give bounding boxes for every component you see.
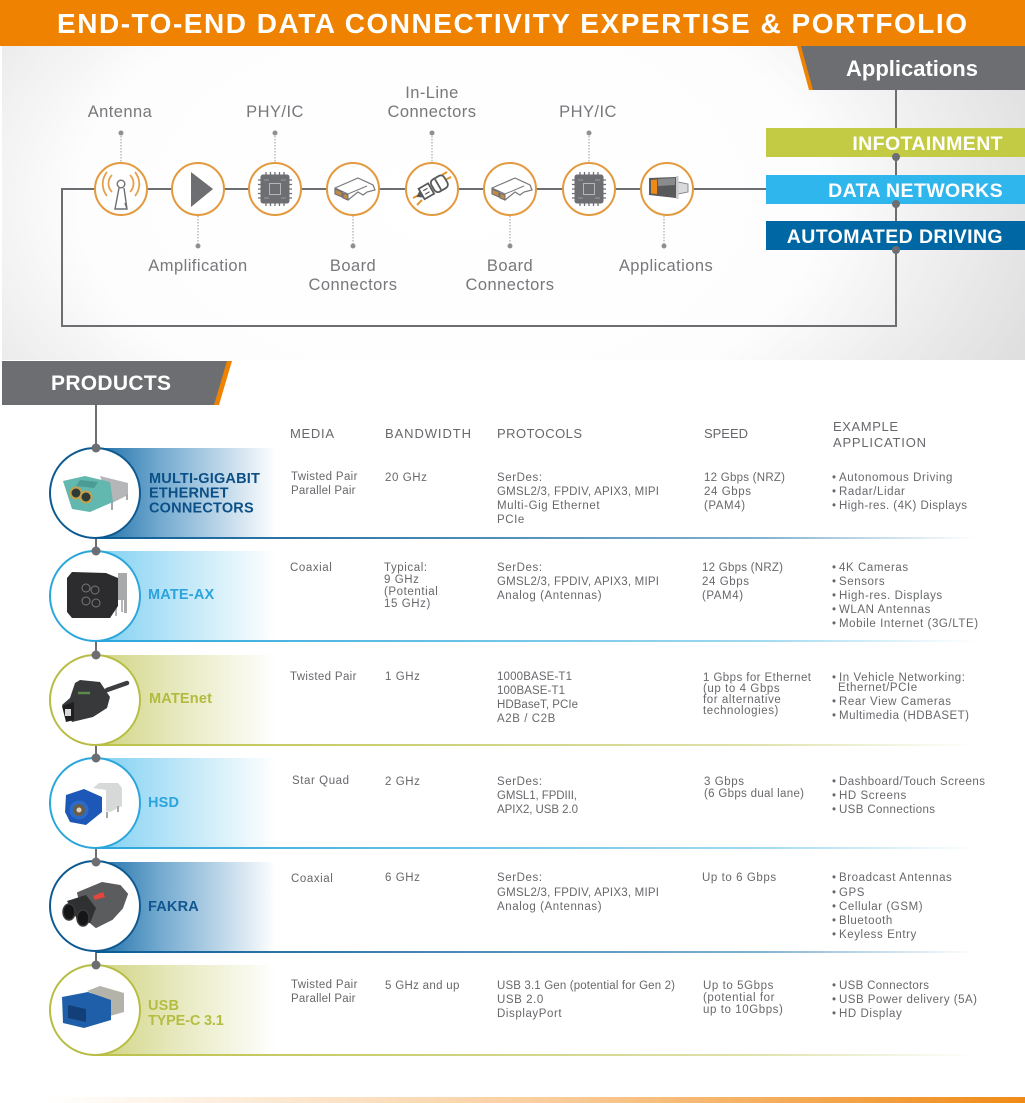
table row 1 values: High-res. (4K) Displays — [839, 500, 967, 512]
table row 1 values: Autonomous Driving — [839, 472, 953, 484]
row: multi-gigabit ethernet connectors: MULTI-GIGABIT — [149, 471, 260, 487]
table row 5 values: Analog (Antennas) — [497, 901, 602, 913]
table row 5 values: Broadcast Antennas — [839, 872, 952, 884]
products tab: PRODUCTS — [51, 372, 171, 395]
table row 2 values: • — [832, 590, 837, 602]
table row 6 values: • — [832, 1008, 837, 1020]
table row 2 values: 4K Cameras — [839, 562, 909, 574]
table row 4 values: Star Quad — [292, 775, 350, 787]
table row 1 values: Radar/Lidar — [839, 486, 905, 498]
table row 6 values: USB Connectors — [839, 980, 929, 992]
table row 5 values: • — [832, 872, 837, 884]
table row 6 values: up to 10Gbps) — [703, 1004, 783, 1016]
table row 1 values: GMSL2/3, FPDIV, APIX3, MIPI — [497, 486, 659, 498]
application bar: automated driving: AUTOMATED DRIVING — [787, 226, 1003, 248]
row: USB Type-C 3.1: TYPE-C 3.1 — [148, 1013, 224, 1029]
table row 2 values: Sensors — [839, 576, 885, 588]
table row 5 values: 6 GHz — [385, 872, 420, 884]
table row 3 values: 1000BASE-T1 — [497, 671, 572, 683]
table row 2 values: SerDes: — [497, 562, 543, 574]
table row 2 values: • — [832, 618, 837, 630]
connector image: FAKRA — [63, 883, 127, 927]
signal chain labels: PHY/IC — [559, 103, 617, 121]
background panel: signal chain — [2, 46, 1025, 360]
table row 3 values: • — [832, 672, 837, 684]
table row 6 values: • — [832, 994, 837, 1006]
table row 4 values: APIX2, USB 2.0 — [497, 804, 578, 816]
applications tab — [797, 46, 1025, 90]
table row 2 values: 24 Gbps — [702, 576, 750, 588]
table row 6 values: USB 2.0 — [497, 994, 544, 1006]
table row 5 values: • — [832, 887, 837, 899]
icon: antenna — [95, 163, 147, 215]
application bar: infotainment: INFOTAINMENT — [852, 133, 1003, 155]
icon: in-line connector — [406, 163, 458, 215]
signal chain labels: Connectors — [466, 276, 554, 294]
table row 3 values: for alternative — [703, 694, 781, 706]
table row 4 values: • — [832, 776, 837, 788]
table column headers: PROTOCOLS — [497, 426, 582, 441]
table row 3 values: (up to 4 Gbps — [703, 683, 780, 695]
application bar: infotainment — [766, 128, 1025, 157]
table row 1 values: 12 Gbps (NRZ) — [704, 472, 785, 484]
table row 5 values: Up to 6 Gbps — [702, 872, 777, 884]
table column headers: EXAMPLE — [833, 419, 898, 434]
table row 1 values: Multi-Gig Ethernet — [497, 500, 600, 512]
table row 2 values: 9 GHz — [384, 574, 420, 586]
table row 2 values: Analog (Antennas) — [497, 590, 602, 602]
table column headers: MEDIA — [290, 426, 334, 441]
table row 5 values: • — [832, 915, 837, 927]
row: MATEnet: MATEnet — [149, 691, 212, 707]
table row 1 values: 20 GHz — [385, 472, 427, 484]
table row 4 values: 2 GHz — [385, 776, 420, 788]
signal chain labels: In-Line — [405, 84, 459, 102]
connector image: blue USB-C — [62, 986, 124, 1028]
table row 5 values: • — [832, 901, 837, 913]
application bar: data networks — [766, 175, 1025, 204]
application connector dots — [892, 153, 900, 254]
table row 1 values: SerDes: — [497, 472, 543, 484]
row: multi-gigabit ethernet connectors — [50, 444, 976, 539]
product spine line — [95, 405, 97, 965]
icon: board connector — [484, 163, 536, 215]
table row 3 values: 100BASE-T1 — [497, 685, 565, 697]
table row 3 values: • — [832, 710, 837, 722]
table row 4 values: (6 Gbps dual lane) — [704, 788, 804, 800]
signal chain labels — [88, 84, 713, 294]
signal chain labels: Connectors — [309, 276, 397, 294]
table row 4 values: SerDes: — [497, 776, 543, 788]
table row 2 values: (Potential — [384, 586, 438, 598]
connector image: blue HSD — [65, 783, 122, 825]
table row 5 values: Cellular (GSM) — [839, 901, 923, 913]
icon: PHY/IC chip — [563, 163, 615, 215]
table row 4 values: HD Screens — [839, 790, 907, 802]
table row 2 values: High-res. Displays — [839, 590, 943, 602]
table row 2 values: 15 GHz) — [384, 598, 431, 610]
table row 6 values: Up to 5Gbps — [703, 980, 774, 992]
row: USB Type-C 3.1: USB — [148, 998, 179, 1014]
table row 2 values: • — [832, 576, 837, 588]
signal chain labels: Board — [330, 257, 376, 275]
table row 6 values: HD Display — [839, 1008, 902, 1020]
title banner — [0, 0, 1025, 46]
title banner: END-TO-END DATA CONNECTIVITY EXPERTISE & PORTFOLIO — [57, 8, 967, 39]
row: MATE-AX — [50, 546, 976, 642]
row: MATE-AX: MATE-AX — [148, 587, 215, 603]
table row 3 values: Rear View Cameras — [839, 696, 952, 708]
table row 5 values — [291, 872, 952, 941]
table row 6 values — [291, 979, 977, 1020]
row: MATEnet — [50, 650, 976, 746]
row: FAKRA: FAKRA — [148, 899, 199, 915]
products tab — [2, 361, 232, 405]
table row 2 values: • — [832, 562, 837, 574]
table column headers — [290, 419, 926, 450]
table row 4 values: • — [832, 804, 837, 816]
footer orange gradient bar — [45, 1097, 1025, 1103]
table row 4 values — [292, 775, 985, 816]
row: HSD — [50, 754, 976, 849]
table row 2 values — [290, 562, 979, 630]
table row 5 values: GPS — [839, 887, 865, 899]
table row 4 values: 3 Gbps — [704, 776, 745, 788]
signal chain labels: Connectors — [388, 103, 476, 121]
table row 4 values: USB Connections — [839, 804, 935, 816]
table row 1 values: • — [832, 472, 837, 484]
table row 2 values: Coaxial — [290, 562, 332, 574]
signal chain connecting line — [62, 90, 896, 326]
icon: PHY/IC chip — [249, 163, 301, 215]
table row 6 values: Parallel Pair — [291, 993, 356, 1005]
row: multi-gigabit ethernet connectors: CONNECTORS — [149, 500, 254, 516]
table row 6 values: (potential for — [703, 992, 775, 1004]
table row 3 values: technologies) — [703, 705, 779, 717]
table column headers: SPEED — [704, 426, 748, 441]
row: USB Type-C 3.1 — [50, 960, 976, 1056]
table row 3 values: • — [832, 696, 837, 708]
table row 2 values: (PAM4) — [702, 590, 744, 602]
table row 2 values: Typical: — [384, 562, 428, 574]
icon: applications module — [641, 163, 693, 215]
table row 1 values: 24 Gbps — [704, 486, 752, 498]
table row 1 values: • — [832, 486, 837, 498]
table row 6 values: • — [832, 980, 837, 992]
table row 3 values: 1 Gbps for Ethernet — [703, 672, 812, 684]
connector image: MATEnet cable plug — [62, 680, 127, 722]
table column headers: APPLICATION — [833, 435, 926, 450]
table row 1 values: (PAM4) — [704, 500, 746, 512]
table row 6 values: USB Power delivery (5A) — [839, 994, 977, 1006]
table row 2 values: GMSL2/3, FPDIV, APIX3, MIPI — [497, 576, 659, 588]
table row 3 values — [290, 671, 969, 725]
table row 2 values: WLAN Antennas — [839, 604, 931, 616]
table row 6 values: 5 GHz and up — [385, 980, 460, 992]
connector image: black MATE-AX — [67, 572, 127, 618]
signal chain labels: Board — [487, 257, 533, 275]
table row 5 values: Keyless Entry — [839, 929, 917, 941]
table row 5 values: SerDes: — [497, 872, 543, 884]
table row 5 values: • — [832, 929, 837, 941]
application bar: data networks: DATA NETWORKS — [828, 180, 1003, 202]
table row 4 values: GMSL1, FPDIII, — [497, 790, 577, 802]
table row 3 values: Ethernet/PCIe — [838, 682, 918, 694]
table row 6 values: DisplayPort — [497, 1008, 562, 1020]
row: HSD: HSD — [148, 795, 179, 811]
connector image: teal ethernet — [63, 476, 128, 512]
table row 6 values: Twisted Pair — [291, 979, 358, 991]
table row 3 values: Multimedia (HDBASET) — [839, 710, 969, 722]
table row 1 values: Twisted Pair — [291, 471, 358, 483]
table row 2 values: 12 Gbps (NRZ) — [702, 562, 783, 574]
table row 1 values: PCIe — [497, 514, 525, 526]
table row 3 values: A2B / C2B — [497, 713, 556, 725]
table row 5 values: Coaxial — [291, 873, 333, 885]
table row 2 values: • — [832, 604, 837, 616]
applications tab: Applications — [846, 56, 978, 81]
table row 3 values: Twisted Pair — [290, 671, 357, 683]
application bar: automated driving — [766, 221, 1025, 250]
table row 3 values: 1 GHz — [385, 671, 420, 683]
table row 5 values: GMSL2/3, FPDIV, APIX3, MIPI — [497, 887, 659, 899]
table row 3 values: In Vehicle Networking: — [839, 672, 966, 684]
table row 1 values: • — [832, 500, 836, 512]
table row 4 values: Dashboard/Touch Screens — [839, 776, 985, 788]
table row 1 values: Parallel Pair — [291, 485, 356, 497]
signal chain labels: Applications — [619, 257, 713, 275]
row: multi-gigabit ethernet connectors: ETHERNET — [149, 486, 229, 502]
row: FAKRA — [50, 858, 976, 953]
icon: amplification — [172, 163, 224, 215]
table row 2 values: Mobile Internet (3G/LTE) — [839, 618, 979, 630]
dotted leader lines — [118, 130, 666, 248]
table row 3 values: HDBaseT, PCIe — [497, 699, 578, 711]
icon: board connector — [327, 163, 379, 215]
table row 4 values: • — [832, 790, 837, 802]
table column headers: BANDWIDTH — [385, 426, 471, 441]
table row 6 values: USB 3.1 Gen (potential for Gen 2) — [497, 980, 675, 992]
table row 1 values — [291, 471, 967, 526]
signal chain labels: PHY/IC — [246, 103, 304, 121]
signal chain labels: Amplification — [148, 257, 248, 275]
signal chain labels: Antenna — [88, 103, 153, 121]
table row 5 values: Bluetooth — [839, 915, 893, 927]
